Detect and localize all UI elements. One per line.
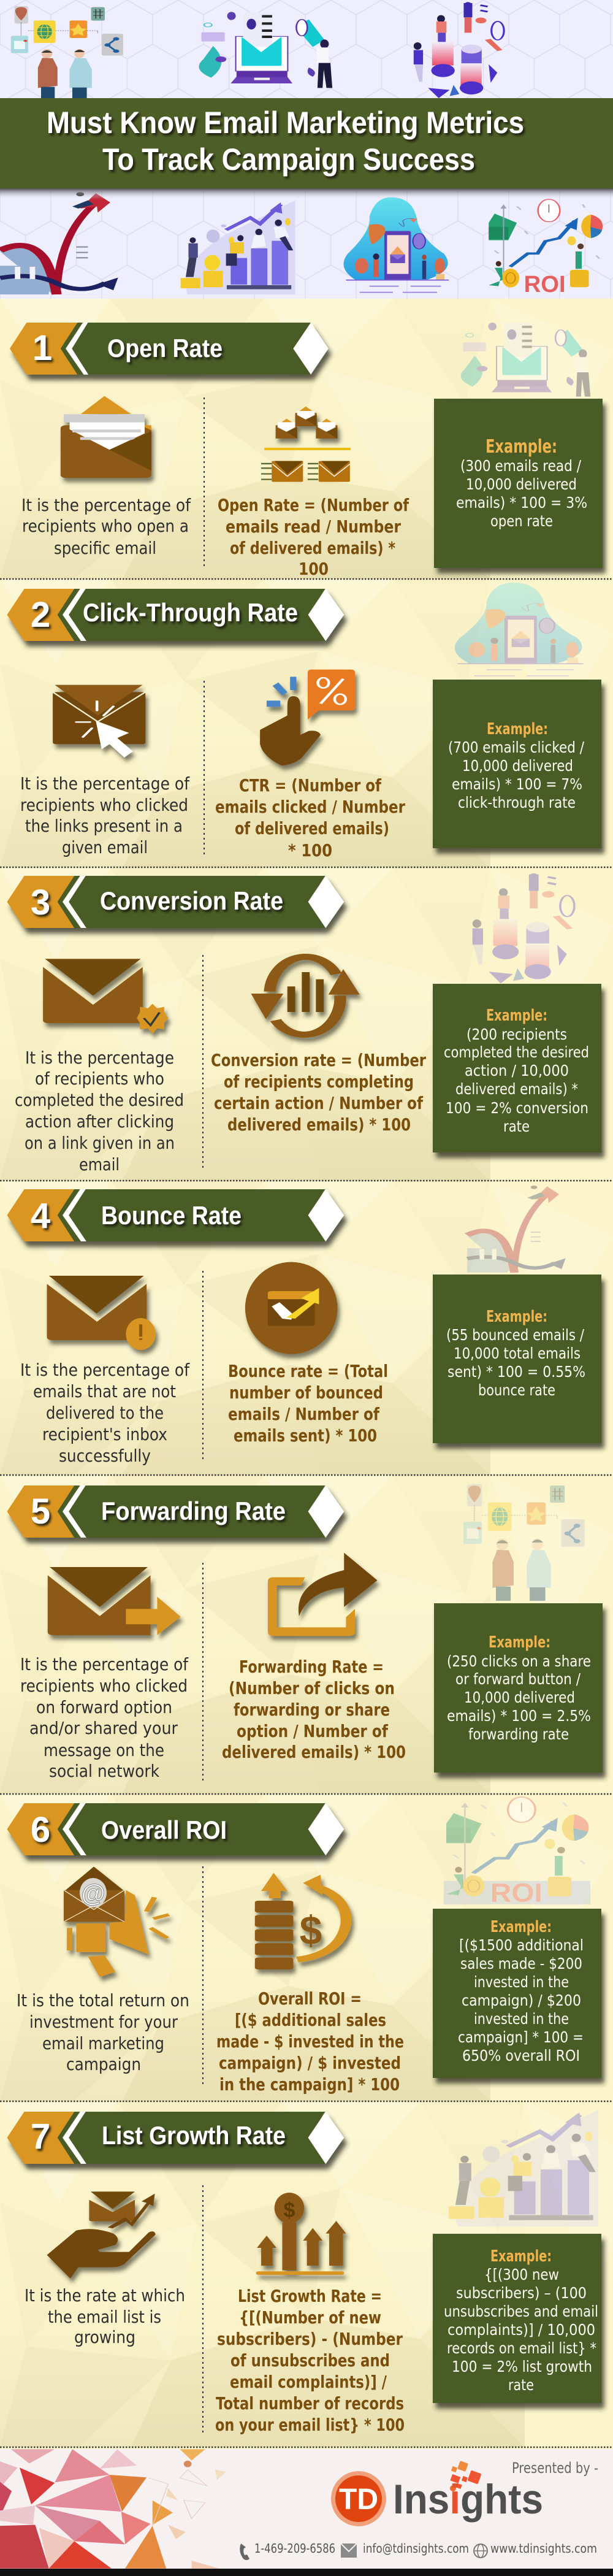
text: definition: recipients who clicked bbox=[20, 1676, 188, 1696]
text: definition: It is the percentage of bbox=[20, 1654, 189, 1674]
icon: envelope with verified badge bbox=[43, 959, 168, 1033]
text: definition bbox=[15, 1048, 184, 1175]
text: formula: Open Rate = (Number of bbox=[218, 495, 409, 515]
panel: 5 forwarding rate bbox=[0, 1475, 613, 1794]
watermark illustration: growth team bbox=[449, 2110, 598, 2226]
illustration: people and coin pillars bbox=[414, 2, 504, 98]
icon: bounce circle with arrow bbox=[245, 1262, 337, 1354]
example box bbox=[433, 984, 601, 1152]
text: definition: completed the desired bbox=[15, 1090, 184, 1110]
text: definition: It is the percentage of bbox=[20, 1360, 190, 1380]
illustration: bounce arrow bbox=[0, 192, 118, 294]
text: definition: recipient's inbox bbox=[42, 1424, 167, 1444]
example box: sales made - $200 bbox=[460, 1955, 582, 1972]
text: definition bbox=[20, 773, 190, 857]
example box: forwarding rate bbox=[468, 1725, 569, 1743]
heading ribbon: overall ROI: 6 bbox=[31, 1810, 50, 1850]
heading ribbon: forwarding rate: Forwarding Rate bbox=[101, 1497, 286, 1525]
text: formula: emails read / Number bbox=[226, 516, 401, 537]
text: formula: number of bounced bbox=[229, 1382, 383, 1403]
divider bbox=[202, 1866, 204, 2085]
example box bbox=[434, 1603, 603, 1773]
example box: (250 clicks on a share bbox=[447, 1652, 591, 1670]
text: definition bbox=[25, 2285, 185, 2347]
title: To Track Campaign Success bbox=[102, 142, 475, 177]
text: definition: emails that are not bbox=[33, 1381, 176, 1401]
icon: opened emails over delivered emails fraction bbox=[276, 407, 337, 439]
text: formula: delivered emails) * 100 bbox=[222, 1742, 406, 1762]
example box: 10,000 total emails bbox=[454, 1344, 581, 1362]
section texture bbox=[0, 1475, 613, 1794]
text: definition: email marketing bbox=[42, 2033, 164, 2053]
text: definition: action after clicking bbox=[25, 1111, 174, 1132]
heading ribbon: list growth rate: List Growth Rate bbox=[102, 2121, 286, 2150]
text: formula: Forwarding Rate = bbox=[239, 1657, 384, 1677]
divider bbox=[204, 397, 205, 569]
panel: hero header bbox=[0, 0, 613, 299]
watermark illustration: ROI chart bbox=[444, 1797, 590, 1907]
text: definition bbox=[20, 1360, 190, 1466]
divider bbox=[202, 1271, 204, 1461]
panel: 7 list growth rate bbox=[0, 2101, 613, 2447]
title: Must Know Email Marketing Metrics bbox=[47, 105, 524, 140]
example box: (200 recipients bbox=[466, 1025, 567, 1043]
text: definition bbox=[17, 1990, 189, 2074]
text: formula: (Number of clicks on bbox=[229, 1678, 395, 1698]
text: definition: growing bbox=[74, 2327, 135, 2347]
example box: invested in the bbox=[474, 1973, 569, 1991]
example box: click-through rate bbox=[458, 794, 576, 811]
decorative polygon network bbox=[0, 2449, 226, 2569]
illustration: team and growth bars bbox=[181, 201, 295, 294]
text: formula: delivered emails) * 100 bbox=[227, 1114, 411, 1135]
icon: email and megaphone: @ bbox=[81, 1880, 105, 1907]
illustration: email laptop and megaphone bbox=[199, 12, 332, 88]
icon: refresh arrows around bars bbox=[251, 957, 360, 1035]
watermark illustration: coin pillars bbox=[473, 873, 574, 983]
fraction bar and delivered emails bbox=[261, 448, 351, 482]
example box: emails) * 100 = 7% bbox=[452, 775, 582, 793]
example box: rate bbox=[503, 1117, 530, 1135]
icon: finger tap with percent bubble bbox=[260, 670, 355, 765]
example box: open rate bbox=[490, 512, 553, 530]
heading ribbon: click-through rate: 2 bbox=[31, 595, 50, 635]
section texture bbox=[0, 867, 613, 1181]
text: definition: on a link given in an bbox=[25, 1133, 175, 1153]
logo: TD Insights: TD bbox=[339, 2483, 378, 2516]
text: definition: message on the bbox=[44, 1740, 164, 1760]
example box: subscribers) – (100 bbox=[456, 2284, 587, 2302]
text: formula: campaign) / $ invested bbox=[219, 2053, 401, 2073]
text: definition: given email bbox=[62, 837, 148, 857]
text: definition: of recipients who bbox=[35, 1068, 164, 1089]
example box: 100 = 2% conversion bbox=[446, 1099, 588, 1117]
text: formula bbox=[228, 1361, 388, 1446]
example box: 10,000 delivered bbox=[464, 1689, 575, 1706]
divider bbox=[202, 955, 204, 1170]
title band shadow bbox=[0, 188, 613, 199]
text: definition: It is the percentage of bbox=[21, 495, 191, 515]
text: definition: and/or shared your bbox=[29, 1718, 178, 1738]
icon: envelope with forward arrow bbox=[48, 1567, 181, 1635]
contact row: 1-469-209-6586 bbox=[254, 2541, 335, 2556]
heading ribbon: overall ROI: Overall ROI bbox=[101, 1815, 227, 1844]
text: definition: It is the rate at which bbox=[25, 2285, 185, 2306]
example box: Example: bbox=[487, 720, 548, 738]
footer background bbox=[0, 2449, 613, 2569]
example box: 650% overall ROI bbox=[462, 2047, 580, 2064]
logo: TD Insights bbox=[331, 2461, 543, 2526]
text: formula: emails clicked / Number bbox=[215, 797, 405, 817]
text: formula: [($ additional sales bbox=[235, 2010, 386, 2030]
heading ribbon: open rate bbox=[10, 323, 329, 375]
text: formula: certain action / Number of bbox=[214, 1093, 424, 1113]
heading ribbon: bounce rate bbox=[7, 1189, 344, 1241]
icon: coin and rising arrows bbox=[256, 2193, 346, 2275]
example box bbox=[433, 2234, 601, 2403]
icon: coin stack with dollar return arrow: $ bbox=[300, 1907, 322, 1953]
text: formula: * 100 bbox=[288, 840, 332, 861]
heading ribbon: click-through rate bbox=[7, 589, 344, 641]
contact row: www.tdinsights.com bbox=[490, 2541, 597, 2556]
text: formula: Total number of records bbox=[216, 2393, 404, 2413]
example box: Example: bbox=[489, 1633, 550, 1652]
hero background with hexagon pattern bbox=[0, 0, 613, 299]
watermark illustration: email laptop bbox=[461, 323, 590, 397]
heading ribbon: click-through rate: Click-Through Rate bbox=[83, 598, 298, 627]
heading ribbon: forwarding rate bbox=[7, 1485, 344, 1538]
contact row bbox=[240, 2541, 597, 2560]
text: formula: emails / Number of bbox=[228, 1404, 380, 1424]
panel: 4 bounce rate bbox=[0, 1181, 613, 1475]
example box: {[(300 new bbox=[484, 2266, 559, 2283]
text: definition: recipients who clicked bbox=[20, 795, 188, 815]
text: formula: option / Number of bbox=[237, 1721, 389, 1741]
heading ribbon: bounce rate: 4 bbox=[31, 1196, 50, 1236]
section texture bbox=[0, 1181, 613, 1475]
icon: open envelope with letter bbox=[61, 396, 151, 478]
text: formula: in the campaign] * 100 bbox=[219, 2074, 400, 2095]
example box: Example: bbox=[485, 436, 557, 458]
icon: email and megaphone bbox=[64, 1866, 169, 1977]
example box: bounce rate bbox=[478, 1381, 555, 1399]
watermark illustration: people sharing bbox=[463, 1484, 585, 1601]
example box: Example: bbox=[490, 1918, 552, 1936]
example box: emails) * 100 = 2.5% bbox=[447, 1707, 591, 1725]
text: definition bbox=[21, 495, 191, 558]
contact row: info@tdinsights.com bbox=[363, 2541, 469, 2556]
heading ribbon: bounce rate: Bounce Rate bbox=[101, 1201, 242, 1230]
panel: 2 click-through rate bbox=[0, 579, 613, 867]
text: definition: It is the percentage bbox=[25, 1048, 174, 1068]
text: definition: social network bbox=[49, 1761, 160, 1781]
example box: emails) * 100 = 3% bbox=[456, 494, 587, 512]
text: formula: Conversion rate = (Number bbox=[211, 1050, 426, 1070]
text: formula: CTR = (Number of bbox=[239, 775, 382, 795]
divider bbox=[202, 1563, 204, 1781]
text: formula: on your email list} * 100 bbox=[215, 2415, 405, 2435]
text: formula: of delivered emails) bbox=[235, 818, 389, 838]
text: formula bbox=[222, 1657, 406, 1762]
example box bbox=[433, 1909, 601, 2078]
text: formula: 100 bbox=[299, 559, 329, 579]
example box: sent) * 100 = 0.55% bbox=[447, 1363, 585, 1381]
text: definition: campaign bbox=[66, 2054, 141, 2074]
text: formula bbox=[215, 775, 405, 861]
illustration: phone with email on teal blob bbox=[343, 197, 449, 293]
panel: 3 conversion rate bbox=[0, 867, 613, 1181]
text: formula bbox=[215, 2286, 405, 2435]
text: formula: List Growth Rate = bbox=[238, 2286, 382, 2306]
icon: coin and rising arrows: $ bbox=[284, 2199, 295, 2222]
illustration: ROI growth chart bbox=[489, 199, 603, 297]
text: formula: email complaints)] / bbox=[230, 2372, 387, 2392]
example box: (55 bounced emails / bbox=[446, 1326, 585, 1344]
example box bbox=[433, 680, 601, 848]
section texture bbox=[0, 579, 613, 867]
text: formula: of recipients completing bbox=[224, 1071, 414, 1092]
text: definition: email bbox=[79, 1154, 120, 1175]
text: formula: emails sent) * 100 bbox=[234, 1425, 377, 1446]
example box: 10,000 delivered bbox=[466, 475, 577, 493]
example box: Example: bbox=[490, 2247, 552, 2266]
watermark illustration: phone bbox=[455, 583, 583, 676]
panel: 1 open rate bbox=[0, 299, 613, 579]
divider bbox=[204, 681, 205, 856]
title band bbox=[0, 98, 613, 188]
title bbox=[47, 105, 524, 177]
text: formula bbox=[218, 495, 409, 579]
example box: 100 = 2% list growth bbox=[452, 2358, 592, 2375]
section texture bbox=[0, 2101, 613, 2447]
panel: 6 overall ROI bbox=[0, 1794, 613, 2101]
example box: campaign) / $200 bbox=[462, 1991, 581, 2009]
text: definition: It is the percentage of bbox=[20, 773, 190, 794]
example box: campaign] * 100 = bbox=[458, 2028, 584, 2046]
panel: footer bbox=[0, 2449, 613, 2576]
text: definition: delivered to the bbox=[46, 1403, 164, 1423]
divider bbox=[202, 2185, 204, 2433]
text: formula: Overall ROI = bbox=[258, 1988, 362, 2009]
example box: or forward button / bbox=[455, 1670, 581, 1688]
example box bbox=[434, 399, 603, 568]
example box: [($1500 additional bbox=[459, 1936, 584, 1954]
example box: (700 emails clicked / bbox=[448, 738, 585, 756]
section texture bbox=[0, 299, 613, 579]
example box: Example: bbox=[486, 1006, 547, 1025]
heading ribbon: overall ROI bbox=[7, 1803, 344, 1855]
heading ribbon: list growth rate: 7 bbox=[31, 2117, 50, 2156]
illustration: two people sharing on phones bbox=[11, 6, 123, 98]
example box: complaints)] / 10,000 bbox=[447, 2321, 595, 2339]
text: formula: of unsubscribes and bbox=[230, 2350, 390, 2371]
example box: (300 emails read / bbox=[460, 457, 582, 475]
example box: invested in the bbox=[474, 2010, 569, 2028]
example box: completed the desired bbox=[444, 1043, 589, 1061]
example box: action / 10,000 bbox=[465, 1062, 569, 1079]
heading ribbon: open rate: 1 bbox=[32, 328, 52, 368]
text: formula: subscribers) - (Number bbox=[217, 2329, 403, 2349]
bottom black bar bbox=[0, 2569, 613, 2576]
text: formula: made - $ invested in the bbox=[216, 2031, 404, 2052]
example box: Example: bbox=[486, 1308, 547, 1326]
heading ribbon: conversion rate: 3 bbox=[31, 883, 50, 922]
text: formula: forwarding or share bbox=[234, 1700, 390, 1720]
text: formula: {[(Number of new bbox=[239, 2307, 381, 2328]
heading ribbon: conversion rate: Conversion Rate bbox=[100, 886, 283, 915]
icon: envelope with alert badge bbox=[47, 1276, 156, 1350]
example box: rate bbox=[508, 2376, 534, 2394]
text: definition bbox=[20, 1654, 189, 1781]
icon: hand holding rising email bbox=[47, 2191, 156, 2279]
heading ribbon: open rate: Open Rate bbox=[107, 334, 223, 362]
text: definition: successfully bbox=[59, 1446, 151, 1466]
text: definition: the links present in a bbox=[25, 816, 183, 836]
icon: envelope with cursor click bbox=[53, 685, 145, 757]
example box: 10,000 delivered bbox=[462, 757, 573, 775]
icon: share out of box arrow bbox=[268, 1553, 377, 1636]
heading ribbon: forwarding rate: 5 bbox=[31, 1492, 50, 1531]
heading ribbon: conversion rate bbox=[7, 876, 344, 928]
section texture bbox=[0, 1794, 613, 2101]
text: formula: Bounce rate = (Total bbox=[228, 1361, 388, 1381]
text: definition: specific email bbox=[54, 538, 156, 558]
text: definition: on forward option bbox=[36, 1697, 172, 1717]
text: formula bbox=[216, 1988, 404, 2095]
example box: delivered emails) * bbox=[455, 1080, 578, 1098]
icon: coin stack with dollar return arrow bbox=[255, 1873, 346, 1969]
text: definition: investment for your bbox=[29, 2012, 178, 2032]
text: definition: the email list is bbox=[48, 2307, 161, 2327]
watermark illustration: bounce arrow bbox=[467, 1186, 566, 1273]
text: formula bbox=[211, 1050, 426, 1135]
example box bbox=[433, 1275, 601, 1443]
text: formula: of delivered emails) * bbox=[230, 538, 395, 558]
text: definition: It is the total return on bbox=[17, 1990, 189, 2011]
heading ribbon: list growth rate bbox=[7, 2112, 344, 2164]
logo: TD Insights: Insights bbox=[393, 2476, 543, 2523]
text: definition: recipients who open a bbox=[22, 516, 189, 536]
